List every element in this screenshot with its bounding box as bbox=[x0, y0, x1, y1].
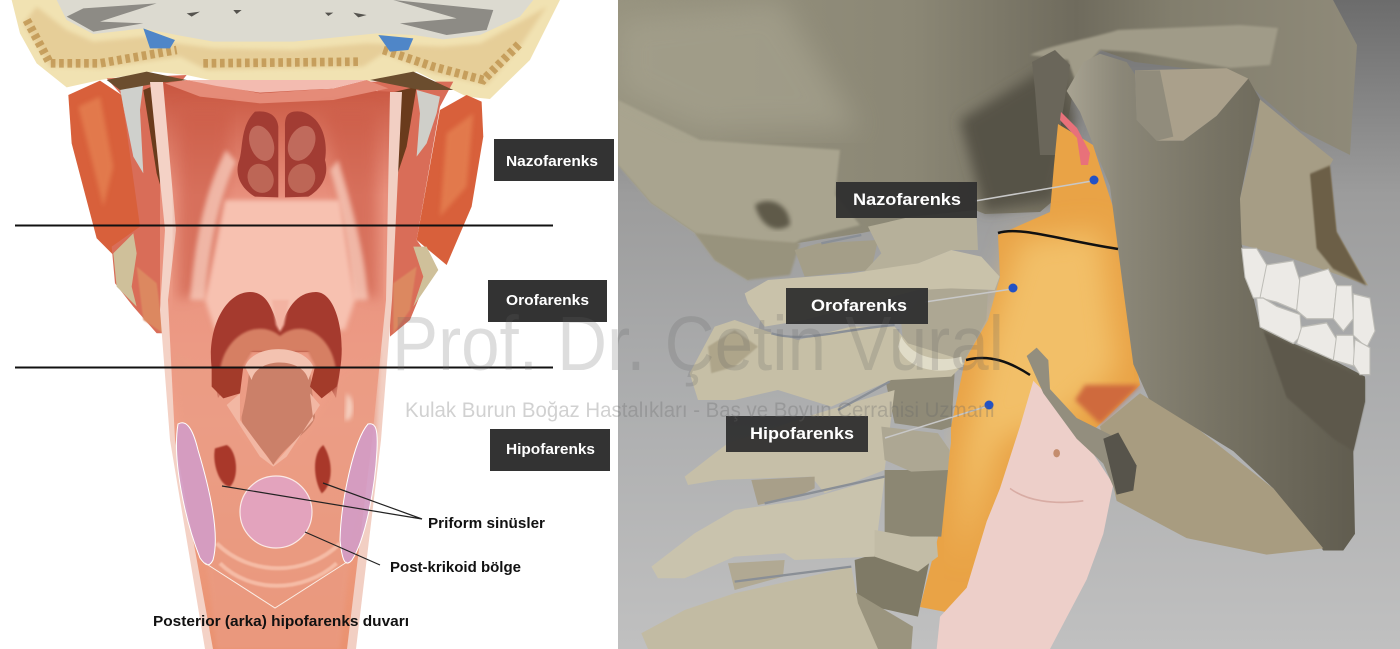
level boundary bottom bbox=[966, 358, 1030, 375]
small pink tissue bbox=[1159, 72, 1168, 90]
label: Hipofarenks right bbox=[726, 416, 868, 452]
pink nasal tissue bbox=[1060, 112, 1090, 165]
pharynx body bbox=[160, 82, 400, 649]
pharynx orange mucosa bbox=[920, 124, 1140, 613]
mandible and maxilla bbox=[1067, 54, 1368, 555]
piriform highlight left bbox=[177, 423, 215, 565]
nasal choanae bbox=[238, 111, 326, 198]
teeth bbox=[1242, 248, 1375, 375]
watermark: Kulak Burun Boğaz Hastalıkları - Baş ve Boyun Cerrahisi Uzmanı bbox=[405, 399, 995, 422]
label: Nazofarenks right: Nazofarenks bbox=[853, 190, 961, 209]
thyroid cartilage and larynx bbox=[937, 348, 1137, 649]
label: Orofarenks right: Orofarenks bbox=[811, 296, 907, 315]
level line lower bbox=[15, 366, 553, 368]
label: Orofarenks left bbox=[488, 280, 607, 322]
label: Hipofarenks left: Hipofarenks bbox=[506, 442, 595, 458]
point markers bbox=[984, 176, 1098, 410]
panel: posterior pharynx illustration bbox=[0, 0, 618, 649]
skull base bbox=[12, 0, 560, 99]
upper pharyngeal arc bbox=[165, 80, 388, 103]
mastoid process bbox=[1032, 50, 1070, 155]
label connector lines bbox=[885, 181, 1092, 438]
label: Nazofarenks left bbox=[494, 139, 614, 181]
label: Hipofarenks right: Hipofarenks bbox=[750, 424, 854, 443]
label: Orofarenks right bbox=[786, 288, 928, 324]
watermark: Prof. Dr. Çetin Vural bbox=[392, 301, 1004, 387]
epiglottis and larynx inlet bbox=[173, 349, 380, 649]
label: Hipofarenks left bbox=[490, 429, 610, 471]
level line upper bbox=[15, 224, 553, 226]
label: Priform sinüsler: Priform sinüsler bbox=[428, 516, 545, 532]
post-cricoid highlight bbox=[240, 476, 312, 548]
vertebrae bbox=[641, 210, 1000, 649]
label: Post-krikoid bölge: Post-krikoid bölge bbox=[390, 560, 521, 576]
level boundary top bbox=[998, 231, 1118, 249]
piriform highlight right bbox=[340, 424, 377, 563]
cranium bbox=[618, 0, 1357, 280]
oropharynx and tongue base bbox=[211, 292, 342, 398]
lateral muscles and ligaments bbox=[68, 72, 483, 337]
label: Nazofarenks right bbox=[836, 182, 977, 218]
label: Posterior hipofarenks duvarı: Posterior (arka) hipofarenks duvarı bbox=[153, 614, 409, 630]
pharyngeal lateral walls bbox=[150, 82, 402, 649]
label: Orofarenks left: Orofarenks bbox=[506, 293, 589, 309]
label: Nazofarenks left: Nazofarenks bbox=[506, 154, 598, 170]
posterior wall bracket bbox=[205, 562, 347, 608]
panel: lateral skull and cervical spine bbox=[618, 0, 1400, 649]
watermark bbox=[392, 301, 1004, 422]
leader lines bbox=[222, 483, 422, 565]
